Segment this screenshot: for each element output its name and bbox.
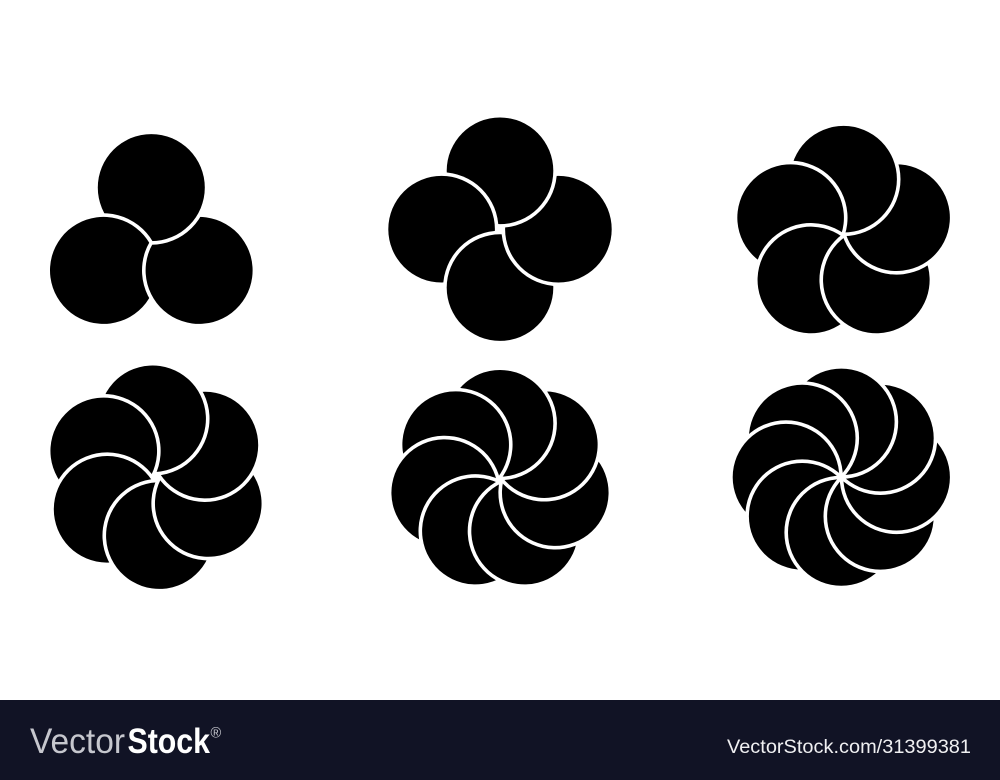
petal 3 [154, 475, 262, 557]
rosette: five petals [737, 126, 950, 334]
petal 3 [844, 442, 950, 530]
petal 1 [790, 126, 897, 232]
rosette: six petals [50, 366, 262, 589]
petal 6 [748, 463, 837, 570]
petal 4 [106, 482, 206, 589]
logo word: Stock: Stock [128, 722, 210, 761]
petal 1 [447, 118, 553, 224]
rosette: four petals [388, 118, 612, 341]
logo registered mark: ® [210, 726, 222, 742]
petal 4 [388, 176, 495, 282]
petal 2 [846, 164, 950, 271]
petal 6 [50, 398, 158, 480]
footer band [0, 700, 1000, 780]
petal 4 [471, 484, 576, 584]
logo word: Vector: Vector [30, 722, 125, 761]
petal 7 [402, 391, 509, 476]
petal 4 [827, 482, 934, 570]
logo: VectorStock wordmark [30, 722, 222, 761]
petal 3 [447, 234, 553, 341]
petal 2 [846, 384, 934, 492]
petal 3 [823, 238, 930, 334]
petal 3 [50, 216, 150, 324]
petal 2 [146, 216, 253, 324]
petal 2 [504, 392, 598, 498]
petal 1 [460, 370, 554, 477]
rosette: seven petals [391, 370, 609, 584]
petal 3 [502, 462, 609, 546]
image id text: VectorStock.com/31399381 [727, 736, 971, 758]
petal 5 [788, 479, 876, 586]
petal 4 [758, 226, 841, 334]
petal 8 [749, 384, 856, 473]
petal 1 [98, 134, 205, 241]
rosette: eight petals [727, 363, 956, 592]
petal 5 [737, 164, 844, 260]
footer background [0, 700, 1000, 780]
petal 7 [732, 424, 840, 512]
petal 2 [505, 176, 612, 282]
rosette: three petals [50, 134, 253, 324]
petal 1 [806, 368, 895, 475]
petal 1 [106, 366, 206, 472]
petal 6 [391, 439, 496, 540]
petal 5 [422, 478, 496, 584]
petal 5 [54, 456, 152, 563]
petal 2 [160, 392, 258, 498]
